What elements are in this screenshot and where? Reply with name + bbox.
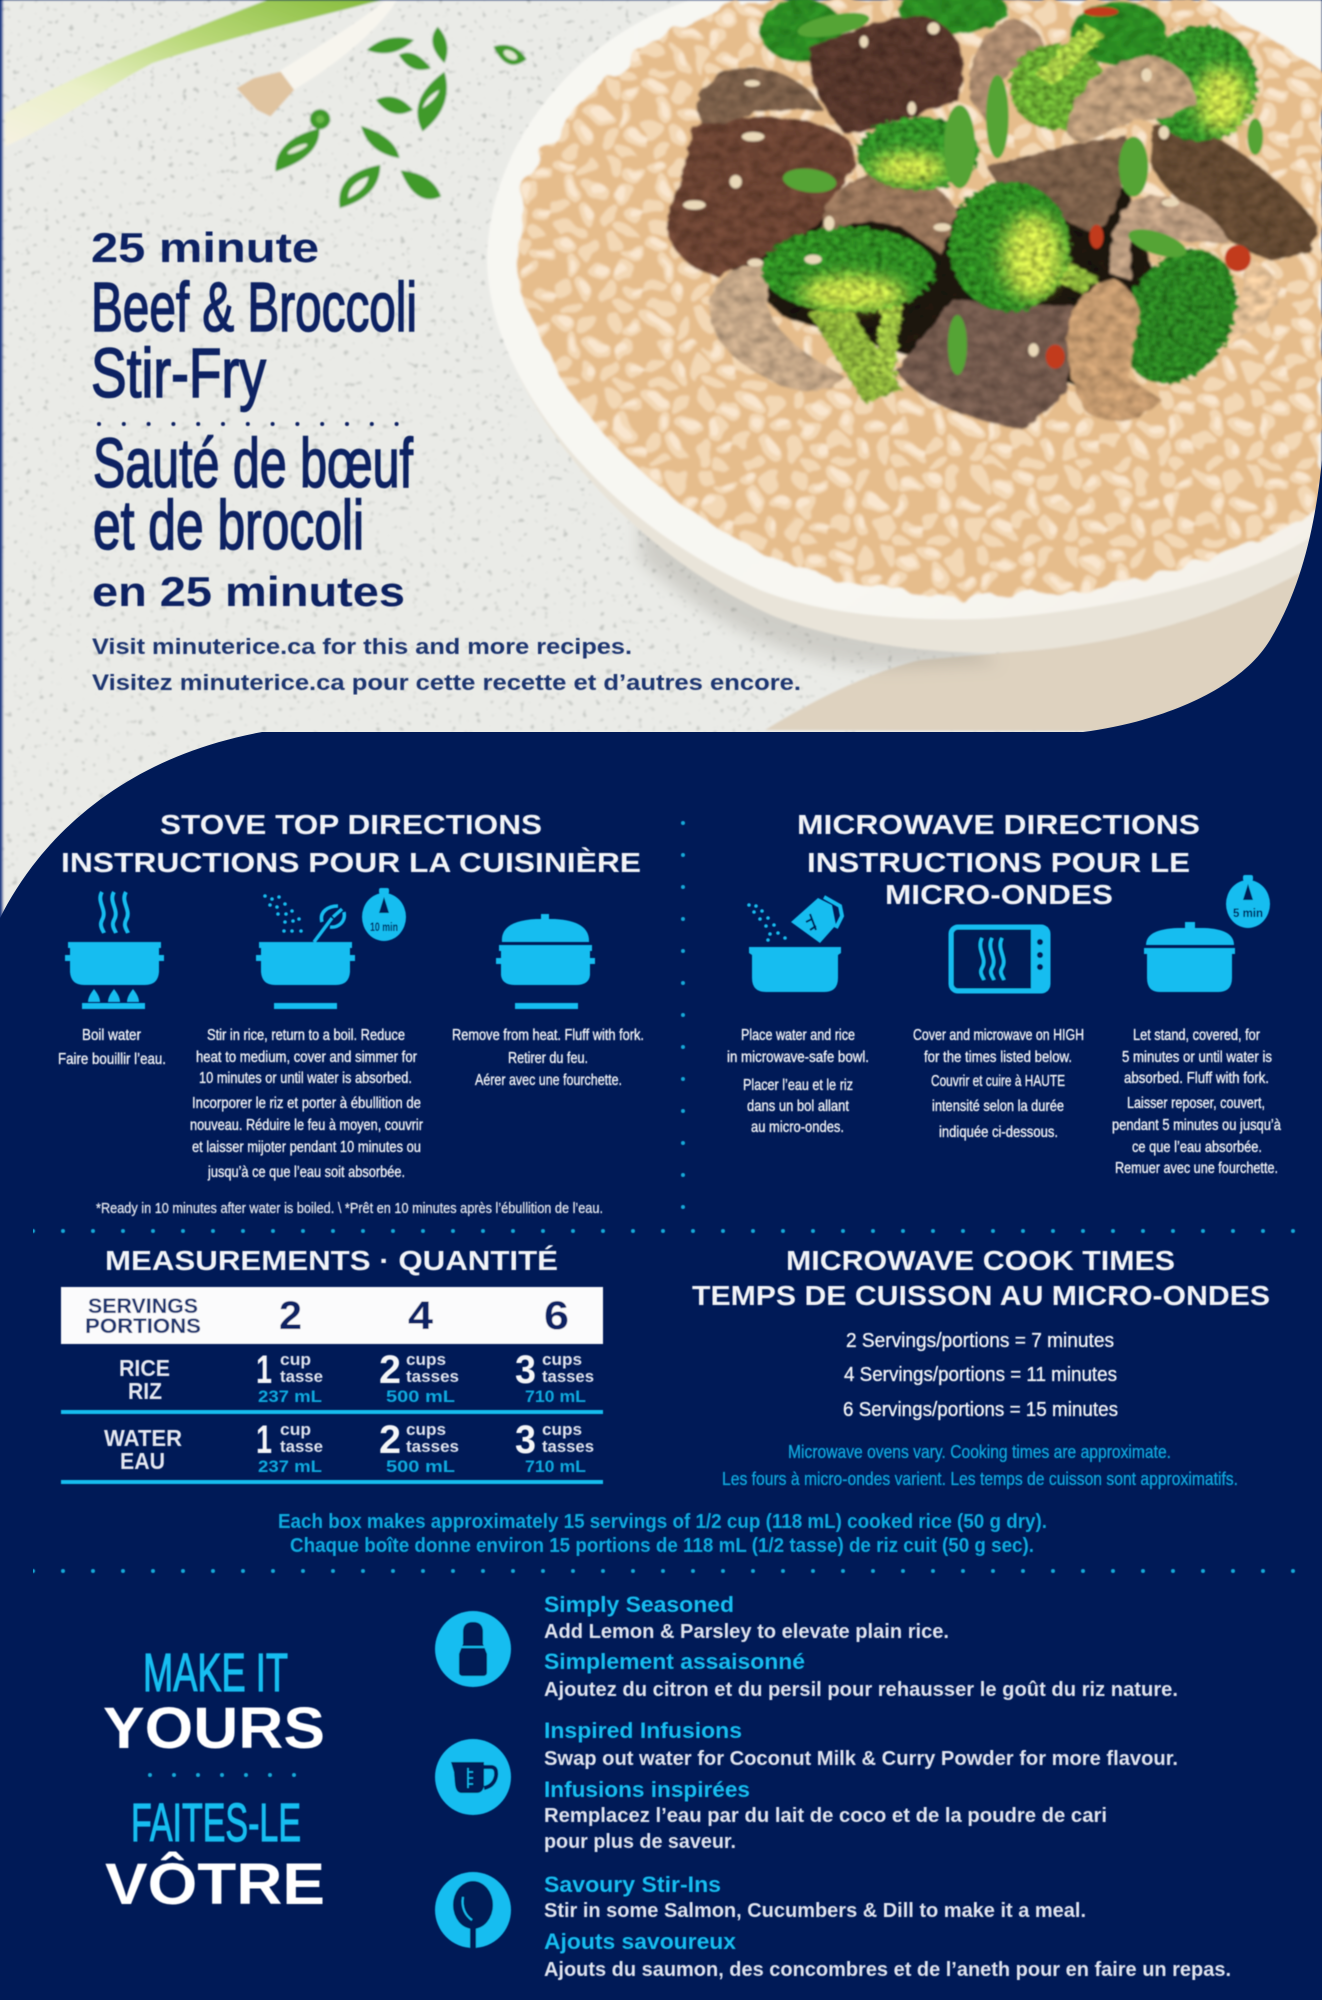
panel: recipe photo background <box>0 0 1322 930</box>
text: simply seasoned <box>544 1592 1178 1701</box>
heading: make it yours: YOURS <box>103 1696 325 1761</box>
text: microwave step 3: Remuer avec une fourchette. <box>1115 1160 1278 1177</box>
icon: covered pot <box>496 914 595 1009</box>
text: step 3: Aérer avec une fourchette. <box>475 1072 622 1089</box>
table header row: 2 <box>279 1294 302 1338</box>
panel: recipe title <box>91 224 801 695</box>
text: step 1: Boil water <box>82 1027 142 1044</box>
text: website english: Visit minuterice.ca for this and more recipes. <box>92 634 632 659</box>
icon: measuring cup <box>435 1739 511 1815</box>
green onion slices <box>780 8 1263 375</box>
sesame seeds <box>683 22 1179 357</box>
text: microwave step 1 <box>727 1027 869 1136</box>
heading: 25 minute: 25 minute <box>91 224 319 271</box>
text: step 2: jusqu’à ce que l’eau soit absorbée. <box>207 1164 405 1181</box>
text: simply seasoned: Ajoutez du citron et du persil pour rehausser le goût du riz nature. <box>544 1679 1178 1701</box>
text: savoury stir-ins: Ajouts du saumon, des concombres et de l’aneth pour en faire un repas. <box>544 1959 1231 1981</box>
table header row: SERVINGS <box>88 1295 198 1318</box>
front mushrooms <box>1066 55 1197 421</box>
table row: water: cup <box>280 1420 311 1439</box>
text: step 3: Remove from heat. Fluff with fork. <box>452 1027 644 1044</box>
beef pieces <box>666 16 1318 430</box>
heading: measurements: MEASUREMENTS · QUANTITÉ <box>105 1245 558 1276</box>
heading: Sauté de bœuf: Sauté de bœuf <box>93 424 413 502</box>
icon: covered bowl <box>1144 922 1235 992</box>
heading: faites-le vôtre: VÔTRE <box>105 1852 325 1917</box>
text: simply seasoned: Simply Seasoned <box>544 1592 734 1617</box>
heading: Stir-Fry: Stir-Fry <box>91 334 266 412</box>
text: microwave step 1: Placer l’eau et le riz <box>743 1077 853 1094</box>
table row: water: tasse <box>280 1437 323 1456</box>
panel: microwave cook times <box>692 1245 1270 1489</box>
table row: water: 2 <box>379 1418 401 1462</box>
text: microwave step 1: in microwave-safe bowl. <box>727 1049 869 1066</box>
icon: 10 minute timer <box>362 888 406 941</box>
icon: linen cloth <box>765 560 1322 732</box>
text: microwave step 2 <box>913 1027 1084 1141</box>
text: cook time list <box>843 1330 1118 1421</box>
text: savoury stir-ins: Ajouts savoureux <box>544 1929 737 1954</box>
text: step 2: Incorporer le riz et porter à ébullition de <box>192 1095 421 1112</box>
text: step 2 <box>190 1027 424 1181</box>
icon: bowl with pouring cup <box>747 897 842 992</box>
table row: water <box>104 1418 594 1476</box>
icon: salt shaker <box>435 1611 511 1687</box>
table row: water: 3 <box>515 1418 536 1462</box>
chili flakes <box>1046 7 1251 369</box>
mushrooms <box>697 18 1279 391</box>
text: savoury stir-ins: Savoury Stir-Ins <box>544 1872 721 1897</box>
icon: pot with rice and fork <box>256 894 355 1009</box>
table row: rice: tasses <box>542 1367 594 1386</box>
table row: water: 1 <box>256 1418 272 1462</box>
heading: microwave cook times: MICROWAVE COOK TIMES <box>786 1245 1175 1276</box>
heading: Beef & Broccoli: Beef & Broccoli <box>91 268 417 346</box>
table row: rice: 500 mL <box>386 1387 455 1406</box>
table row: rice: 1 <box>256 1348 272 1392</box>
heading: instructions pour le: INSTRUCTIONS POUR LE <box>807 847 1190 878</box>
panel: microwave directions <box>727 809 1281 1177</box>
table row: rice: cups <box>542 1350 582 1369</box>
heading: make it yours <box>103 1643 325 1761</box>
icon: beef, broccoli and mushroom stir-fry <box>666 0 1318 430</box>
text: microwave step 3: Laisser reposer, couvert, <box>1127 1095 1265 1112</box>
text: step 1: Faire bouillir l’eau. <box>58 1051 166 1068</box>
icon: 5 minute timer <box>1226 875 1270 928</box>
icon: pot boiling on burner <box>65 892 164 1009</box>
text: inspired infusions: pour plus de saveur. <box>544 1831 736 1853</box>
text: simply seasoned: Simplement assaisonné <box>544 1649 805 1674</box>
text: website french: Visitez minuterice.ca pour cette recette et d’autres encore. <box>92 670 801 695</box>
heading: et de brocoli: et de brocoli <box>93 486 364 564</box>
text: step 3: Retirer du feu. <box>508 1050 588 1067</box>
text: cook time list: 6 Servings/portions = 15 minutes <box>843 1399 1118 1421</box>
text: inspired infusions: Infusions inspirées <box>544 1777 750 1802</box>
table row: rice <box>119 1348 594 1406</box>
heading: instructions pour la cuisinière: INSTRUCTIONS POUR LA CUISINIÈRE <box>61 847 641 878</box>
table row: rice: tasses <box>406 1367 459 1386</box>
table row: rice: 237 mL <box>258 1387 322 1406</box>
table header row: 4 <box>408 1294 434 1338</box>
table row: water: 710 mL <box>525 1457 586 1476</box>
table row: water: WATER <box>104 1425 182 1451</box>
text: microwave ovens vary note <box>722 1442 1238 1489</box>
text: step 2: et laisser mijoter pendant 10 minutes ou <box>192 1139 421 1156</box>
text: step 2: Stir in rice, return to a boil. Reduce <box>207 1027 405 1044</box>
icon: whole green onion <box>5 0 397 147</box>
text: microwave step 1: dans un bol allant <box>747 1098 849 1115</box>
heading: microwave directions: MICROWAVE DIRECTIONS <box>797 809 1200 840</box>
heading: faites-le vôtre: FAITES-LE <box>131 1793 301 1853</box>
heading: make it yours: MAKE IT <box>143 1643 288 1703</box>
icon: rice <box>516 0 1322 597</box>
text: microwave step 3: 5 minutes or until water is <box>1122 1049 1272 1066</box>
heading: temps de cuisson: TEMPS DE CUISSON AU MICRO-ONDES <box>692 1280 1270 1311</box>
table row: rice: 710 mL <box>525 1387 586 1406</box>
icon: bowl shadow <box>640 510 1000 668</box>
text: ready footnote: *Ready in 10 minutes after water is boiled. \ *Prêt en 10 minutes après l’ébullition de l’eau. <box>96 1200 603 1217</box>
table row: water: cups <box>542 1420 582 1439</box>
text: microwave step 2: Cover and microwave on HIGH <box>913 1027 1084 1044</box>
broccoli florets <box>762 25 1257 397</box>
text: box yield note: Chaque boîte donne environ 15 portions de 118 mL (1/2 tasse) de riz cuit (50 g sec). <box>290 1535 1034 1557</box>
text: cook time list: 2 Servings/portions = 7 minutes <box>846 1330 1114 1352</box>
text: microwave step 2: for the times listed below. <box>924 1049 1072 1066</box>
text: microwave step 3: pendant 5 minutes ou jusqu’à <box>1112 1117 1281 1134</box>
table row: rice: tasse <box>280 1367 323 1386</box>
text: microwave step 2: intensité selon la durée <box>932 1098 1064 1115</box>
text: savoury stir-ins: Stir in some Salmon, Cucumbers & Dill to make it a meal. <box>544 1900 1086 1922</box>
text: savoury stir-ins <box>544 1872 1231 1981</box>
text: microwave ovens vary note: Microwave ovens vary. Cooking times are approximate. <box>788 1442 1171 1462</box>
table row: rice: 3 <box>515 1348 536 1392</box>
icon: sliced green onion pieces <box>275 27 527 208</box>
panel: make it yours <box>103 1592 1231 1981</box>
text: simply seasoned: Add Lemon & Parsley to elevate plain rice. <box>544 1621 949 1643</box>
table header row <box>61 1287 603 1344</box>
table row: rice: cup <box>280 1350 311 1369</box>
table header row: PORTIONS <box>85 1315 201 1338</box>
text: inspired infusions: Inspired Infusions <box>544 1718 742 1743</box>
text: inspired infusions: Remplacez l’eau par du lait de coco et de la poudre de cari <box>544 1805 1107 1827</box>
text: step 3 <box>452 1027 644 1089</box>
icon: 10 minute timer: 10 min <box>370 920 398 934</box>
icon: spoon <box>435 1872 511 1950</box>
text: microwave step 2: indiquée ci-dessous. <box>939 1124 1058 1141</box>
text: microwave step 3: absorbed. Fluff with fork. <box>1124 1070 1269 1087</box>
text: step 2: heat to medium, cover and simmer for <box>196 1049 418 1066</box>
table header row: 6 <box>544 1294 569 1338</box>
text: step 2: 10 minutes or until water is absorbed. <box>199 1070 412 1087</box>
text: microwave step 3: Let stand, covered, for <box>1133 1027 1261 1044</box>
text: step 1 <box>58 1027 166 1068</box>
icon: 5 minute timer: 5 min <box>1233 906 1263 920</box>
heading: en 25 minutes: en 25 minutes <box>92 568 405 615</box>
table row: rice: RIZ <box>128 1378 162 1404</box>
heading: faites-le vôtre <box>105 1793 325 1917</box>
panel: navy directions background <box>0 460 1322 2000</box>
heading: stove top directions: STOVE TOP DIRECTIONS <box>160 809 542 840</box>
table row: water: tasses <box>406 1437 459 1456</box>
text: microwave step 3 <box>1112 1027 1281 1177</box>
text: inspired infusions: Swap out water for Coconut Milk & Curry Powder for more flavour. <box>544 1748 1178 1770</box>
text: cook time list: 4 Servings/portions = 11 minutes <box>844 1364 1117 1386</box>
table row: rice: cups <box>406 1350 446 1369</box>
table row: rice: 2 <box>379 1348 401 1392</box>
heading: micro-ondes: MICRO-ONDES <box>885 879 1113 910</box>
text: microwave ovens vary note: Les fours à micro-ondes varient. Les temps de cuisson sont approximatifs. <box>722 1469 1238 1489</box>
table row: water: 500 mL <box>386 1457 455 1476</box>
table row: rice: RICE <box>119 1355 170 1381</box>
text: microwave step 2: Couvrir et cuire à HAUTE <box>931 1073 1065 1090</box>
text: step 2: nouveau. Réduire le feu à moyen, couvrir <box>190 1117 424 1134</box>
table row: water: tasses <box>542 1437 594 1456</box>
icon: microwave oven <box>951 927 1048 991</box>
table row: water: EAU <box>120 1448 165 1474</box>
text: microwave step 3: ce que l’eau absorbée. <box>1132 1139 1262 1156</box>
text: inspired infusions <box>544 1718 1178 1853</box>
text: microwave step 1: Place water and rice <box>741 1027 855 1044</box>
table row: water: cups <box>406 1420 446 1439</box>
panel: measurements table <box>61 1245 603 1484</box>
text: box yield note: Each box makes approximately 15 servings of 1/2 cup (118 mL) cooked rice (50 g dry). <box>278 1511 1047 1533</box>
table row: water: 237 mL <box>258 1457 322 1476</box>
panel: stove top directions <box>58 809 644 1217</box>
text: box yield note <box>278 1511 1047 1557</box>
text: microwave step 1: au micro-ondes. <box>751 1119 844 1136</box>
icon: white bowl <box>487 0 1322 653</box>
